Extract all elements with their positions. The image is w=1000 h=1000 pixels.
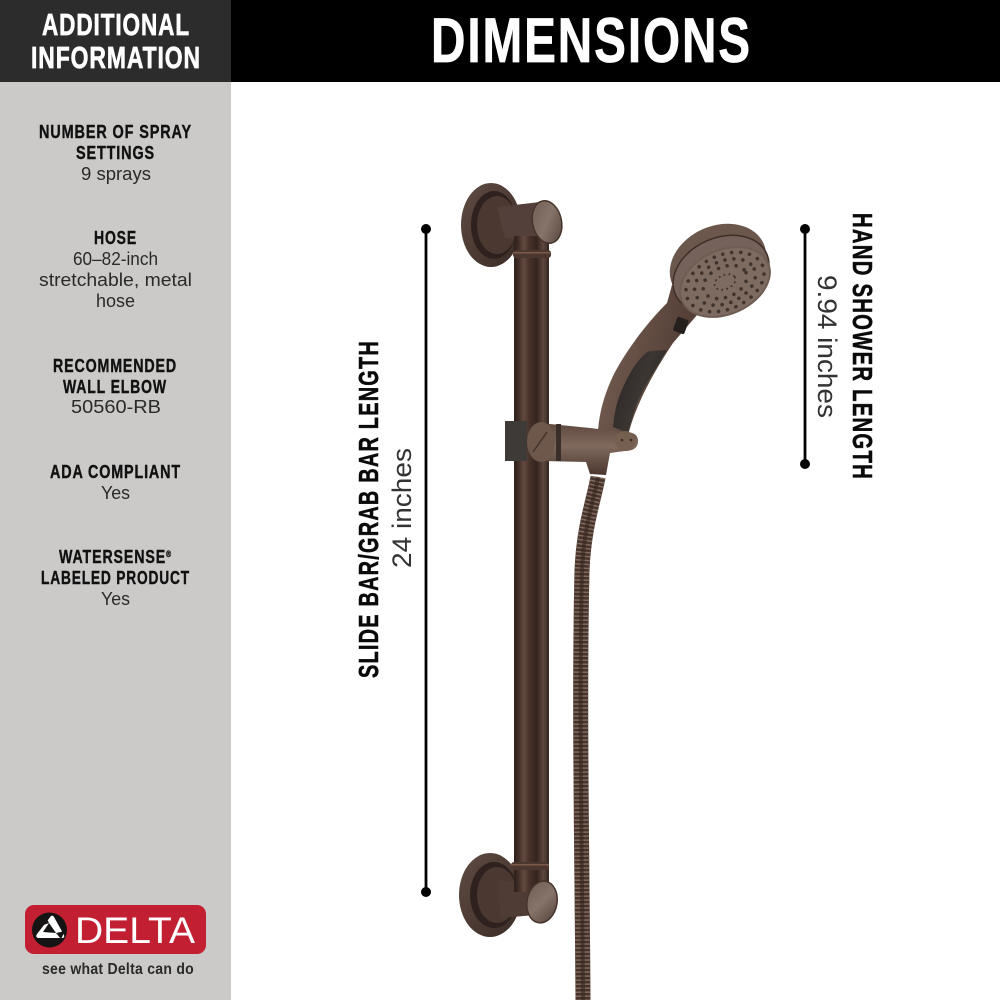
value: 9.94 inches: 9.94 inches (812, 275, 842, 418)
dimension line: slide bar length (421, 224, 431, 897)
top collar (513, 250, 551, 258)
spec: number of spray settings: 9 sprays (81, 164, 151, 184)
spec: hose (39, 227, 192, 311)
delta logo: DELTA (75, 910, 195, 951)
spec: watersense labeled product: ® (166, 549, 172, 559)
spec: watersense labeled product: WATERSENSE (59, 546, 198, 567)
spec: number of spray settings (39, 121, 192, 184)
spec: ada compliant: ADA COMPLIANT (50, 461, 181, 482)
header: additional information: ADDITIONAL (42, 8, 190, 42)
spec: number of spray settings: SETTINGS (76, 142, 155, 163)
clamp body (527, 422, 638, 475)
bottom cap (524, 879, 560, 925)
bar (514, 236, 549, 892)
icon: delta emblem (32, 912, 67, 948)
label: slide bar length: SLIDE BAR/GRAB BAR LENGTH (353, 340, 384, 678)
clamp block (505, 421, 527, 461)
spec: hose: stretchable, metal (39, 270, 192, 290)
bottom collar (511, 862, 549, 870)
spec: hose: HOSE (94, 227, 137, 248)
hose (581, 477, 598, 1000)
spec: watersense labeled product (41, 546, 190, 609)
spec: hose: 60–82-inch (73, 249, 158, 269)
shower head groove (661, 221, 781, 327)
spec: recommended wall elbow (53, 355, 177, 417)
label: hand shower length: HAND SHOWER LENGTH (847, 213, 878, 480)
shower head back (657, 209, 779, 319)
spec: recommended wall elbow: RECOMMENDED (53, 355, 177, 376)
spec: recommended wall elbow: WALL ELBOW (63, 376, 167, 397)
dimension line: hand shower length (800, 224, 810, 469)
spec: watersense labeled product: LABELED PRODUCT (41, 567, 190, 588)
product: slide bar with hand shower (459, 183, 782, 1000)
delta logo (25, 905, 206, 978)
header: additional information: INFORMATION (31, 41, 201, 75)
header: dimensions (231, 0, 1000, 82)
spec: watersense labeled product: Yes (101, 589, 130, 609)
shower button (673, 316, 689, 335)
spec: ada compliant: Yes (101, 483, 130, 503)
top wall mount (461, 183, 545, 267)
hand shower grip (613, 350, 667, 433)
spec: hose: hose (96, 291, 135, 311)
delta logo: see what Delta can do (42, 961, 194, 978)
header: dimensions: DIMENSIONS (431, 6, 752, 76)
shower head face (668, 232, 782, 332)
spray nozzles (677, 241, 773, 323)
spec: recommended wall elbow: 50560-RB (71, 397, 161, 417)
header: additional information (0, 0, 231, 82)
top cap (528, 198, 566, 246)
spec: number of spray settings: NUMBER OF SPRAY (39, 121, 192, 142)
hand shower handle (598, 285, 697, 436)
sidebar panel (0, 82, 231, 1000)
bottom wall mount (459, 853, 535, 937)
value: 24 inches: 24 inches (387, 448, 417, 568)
spec: ada compliant (50, 461, 181, 503)
